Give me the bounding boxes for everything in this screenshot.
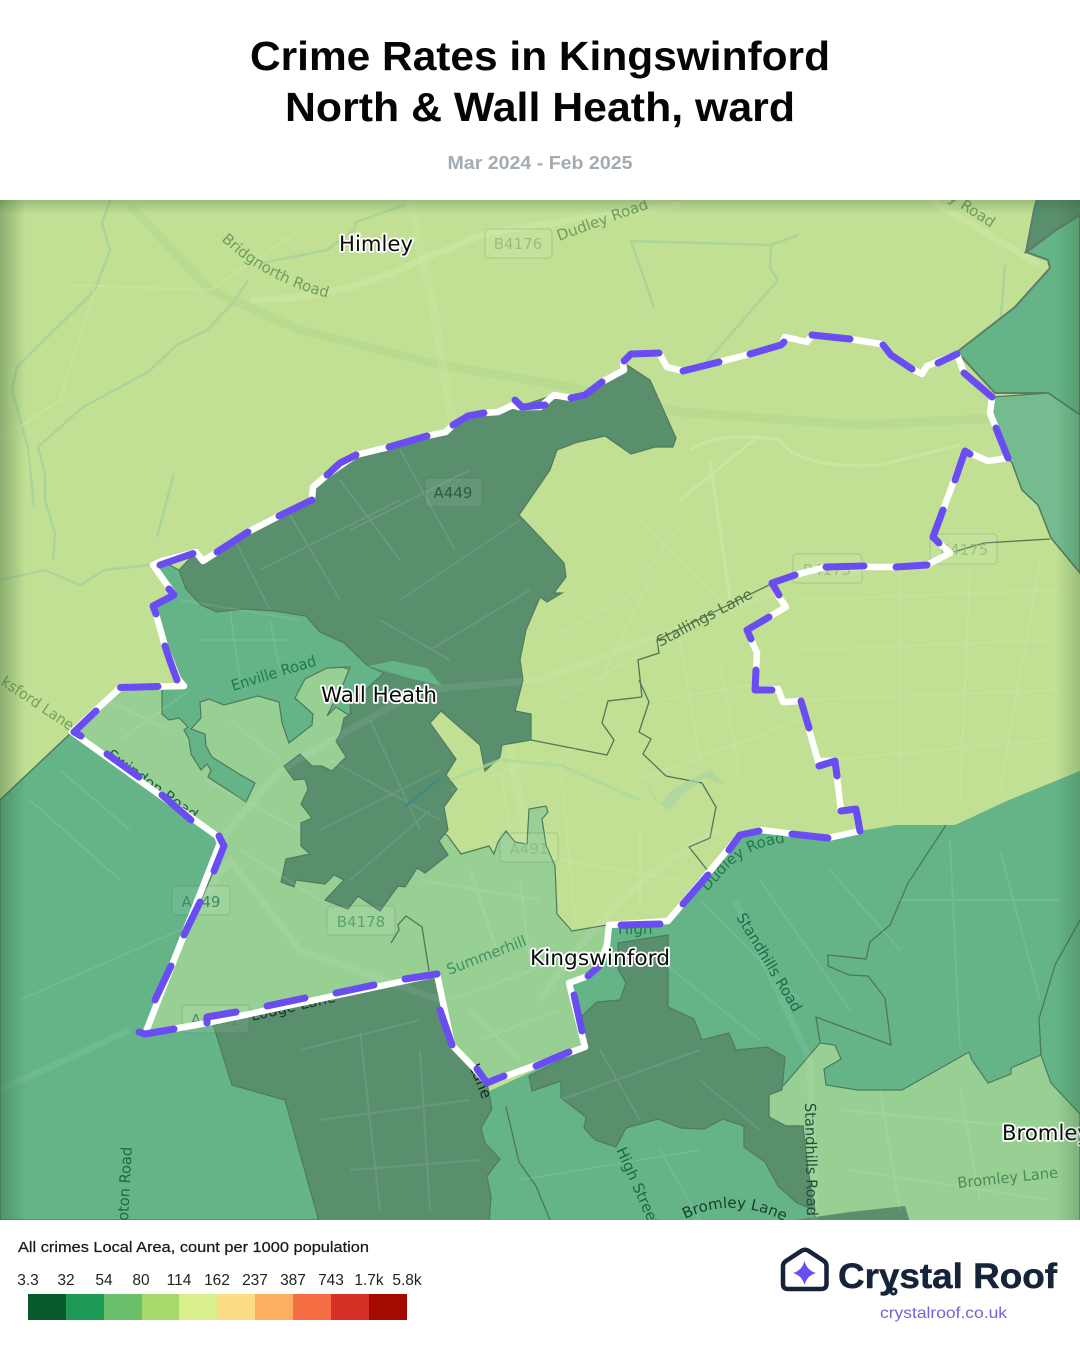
place label: Wall Heath: Wall Heath [321,683,437,707]
water: pond and stream [405,760,725,810]
map label: Dudley Road: Dudley Road [554,195,651,245]
road badge: B4176 [485,229,552,258]
map label: road at bottom left: oton Road [114,1146,136,1221]
map label: Dudley Road lower: Dudley Road [703,835,784,890]
legend tick labels: 5.8k [392,1272,422,1289]
map label: High Street top: High [618,920,652,938]
legend [17,1239,422,1320]
map label: Bromley Lane bottom: Bromley Lane [682,1196,786,1220]
logo: Crystal Roof [783,1250,1057,1322]
region: south dark area [212,974,500,1225]
region: west light-green ward section [72,650,607,1083]
region: east teal area [990,393,1080,573]
region: Kingswinford south dark area [529,935,815,1210]
map label: Enville Road: Enville Road [229,652,318,695]
place label: Himley: Himley [339,232,413,256]
road badge: B4176: B4176 [494,235,542,253]
legend tick labels: 743 [318,1272,344,1289]
region: Bromley light-green area [769,1043,1080,1225]
legend tick labels: 387 [280,1272,306,1289]
legend colour bar [28,1294,407,1320]
wordmark y detail [890,1288,898,1296]
map label: Lodge Lane: Lodge Lane [249,988,337,1025]
map label: top right road: y Road [946,188,999,231]
region: Wall Heath dark area [179,363,676,911]
road badge: A491: A491 [510,840,548,858]
map label: Stallings Lane: Stallings Lane [653,585,755,651]
legend tick labels: 162 [204,1272,230,1289]
road badge: A449 north: A449 [434,484,472,502]
title [250,33,830,130]
subtitle: date range: Mar 2024 - Feb 2025 [448,153,632,173]
place label: Kingswinford: Kingswinford [530,946,670,970]
region: bottom dark strip [795,1206,910,1220]
road badge: A449 north [425,478,482,507]
map label: Hocksford Lane fragment: ksford Lane [0,672,77,734]
road badge: A4101: A4101 [191,1011,239,1029]
legend tick labels: 80 [132,1272,150,1289]
neighbourhood borders [0,463,1080,1220]
map label: Bromley Lane right: Bromley Lane [957,1164,1059,1192]
ward boundary: white base line [72,335,1008,1083]
map label: road beneath ward line: Swindon Road [104,746,202,824]
legend tick labels: 3.3 [17,1272,39,1289]
road badge: B4175 west [793,554,862,583]
ward boundary: purple dashes [74,335,1008,1083]
legend tick labels: 1.7k [354,1272,384,1289]
title: Crime Rates in Kingswinford [250,33,830,79]
map label: Bridgnorth Road: Bridgnorth Road [222,233,329,298]
region: south-west mid-green area [0,732,340,1220]
panel: choropleth map [0,200,1080,1220]
road badge: B4178 [327,906,395,935]
website url: crystalroof.co.uk [880,1305,1008,1322]
street network [20,450,1060,1220]
road badge: B4178: B4178 [337,913,385,931]
region: east mid-green area [470,771,1080,1220]
map label: Standhills Road lower: Standhills Road [801,1103,821,1216]
map label: Summerhill: Summerhill [444,932,529,979]
region: Enville Road mid-green area [157,565,383,803]
road badge: A449 south [172,886,230,915]
title: North & Wall Heath, ward [285,84,795,130]
road badge: A449 south: A449 [182,893,220,911]
legend tick labels: 54 [95,1272,113,1289]
legend tick labels: 114 [167,1272,192,1289]
map label: Standhills Road upper: Standhills Road [733,910,806,1015]
region: north-east corner dark area [1026,195,1080,252]
legend title: All crimes Local Area, count per 1000 population [18,1239,369,1256]
map label: Lane fragment: Lane [465,1061,496,1101]
map label: High Street bottom: High Street [612,1144,663,1229]
road badge: B4175 east: B4175 [940,541,988,559]
region: north-east mid-green area [957,215,1080,415]
map edge vignette [0,200,1080,1220]
icon: house with star [783,1250,826,1289]
legend tick labels: 237 [242,1272,268,1289]
legend tick labels: 32 [57,1272,75,1289]
road badge: A4101 [182,1005,249,1033]
wordmark: Crystal Roof [838,1257,1057,1296]
legend tick labels [17,1272,422,1289]
region: wedge north of Wall Heath label [368,661,442,686]
road badge: B4175 west: B4175 [803,561,851,579]
base map: streams and tracks on open land [0,200,1040,1220]
road badge: B4175 east [930,534,997,564]
road badge: A491 [500,833,558,862]
